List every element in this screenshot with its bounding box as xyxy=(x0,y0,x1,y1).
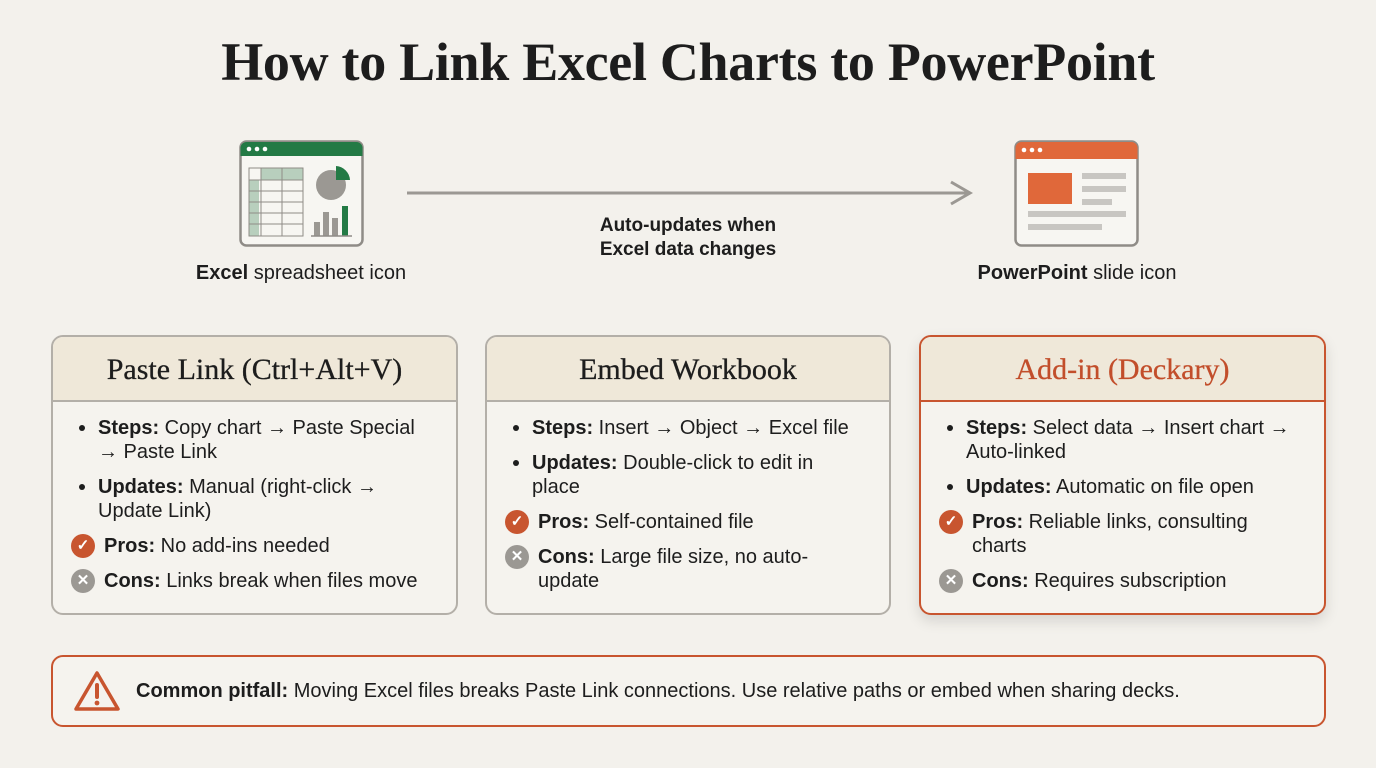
arrow label xyxy=(600,215,776,260)
panel: add-in: ✓ xyxy=(945,513,957,530)
panel: paste link: ✓ xyxy=(77,537,89,554)
label: excel: Excel spreadsheet icon xyxy=(196,262,406,284)
panel: embed workbook xyxy=(485,335,891,615)
panel: embed workbook: update xyxy=(538,570,599,592)
icon: powerpoint slide xyxy=(1014,140,1139,247)
icon: warning xyxy=(74,671,120,711)
panel: paste link: ✕ xyxy=(77,572,89,589)
callout: common pitfall xyxy=(51,655,1326,727)
panel: paste link xyxy=(51,335,458,615)
arrow label: Auto-updates when xyxy=(600,215,776,236)
pitfall text: Common pitfall: Moving Excel files breaks Paste Link connections. Use relative paths or embed when sharing decks. xyxy=(136,680,1180,702)
panel: add-in: Updates: Automatic on file open xyxy=(966,476,1254,498)
heading: add-in: Add-in (Deckary) xyxy=(1015,353,1230,386)
label: powerpoint: PowerPoint slide icon xyxy=(978,262,1176,284)
panel: add-in: Pros: Reliable links, consulting xyxy=(972,511,1248,533)
title: How to Link Excel Charts to PowerPoint xyxy=(221,32,1155,92)
panel: embed workbook: Cons: Large file size, no auto- xyxy=(538,546,808,568)
panel: embed workbook: Pros: Self-contained file xyxy=(538,511,754,533)
panel: paste link: Cons: Links break when files move xyxy=(104,570,417,592)
panel: embed workbook: place xyxy=(532,476,580,498)
panel: embed workbook: ✕ xyxy=(511,548,523,565)
panel: embed workbook: Updates: Double-click to edit in xyxy=(532,452,813,474)
panel: embed workbook: Steps: Insert → Object → Excel file xyxy=(532,417,849,439)
icon: excel spreadsheet xyxy=(239,140,364,247)
heading: add-in xyxy=(921,337,1324,402)
panel: add-in: charts xyxy=(972,535,1026,557)
heading: embed xyxy=(487,337,889,402)
panel: paste link: Update Link) xyxy=(98,500,211,522)
panel: paste link: Steps: Copy chart → Paste Special xyxy=(98,417,415,439)
panel: paste link: Pros: No add-ins needed xyxy=(104,535,330,557)
arrow label: Excel data changes xyxy=(600,239,776,260)
heading: embed: Embed Workbook xyxy=(579,353,797,386)
panel: add-in: ✕ xyxy=(945,572,957,589)
arrow: auto-update xyxy=(407,180,973,206)
heading: paste link: Paste Link (Ctrl+Alt+V) xyxy=(107,353,402,386)
panel: add-in xyxy=(919,335,1326,615)
panel: add-in: Cons: Requires subscription xyxy=(972,570,1227,592)
panel: paste link: → Paste Link xyxy=(98,441,217,463)
panel: add-in: Auto-linked xyxy=(966,441,1066,463)
heading: paste link xyxy=(53,337,456,402)
panel: add-in: Steps: Select data → Insert chart → xyxy=(966,417,1289,439)
panel: embed workbook: ✓ xyxy=(511,513,523,530)
panel: paste link: Updates: Manual (right-click → xyxy=(98,476,377,498)
